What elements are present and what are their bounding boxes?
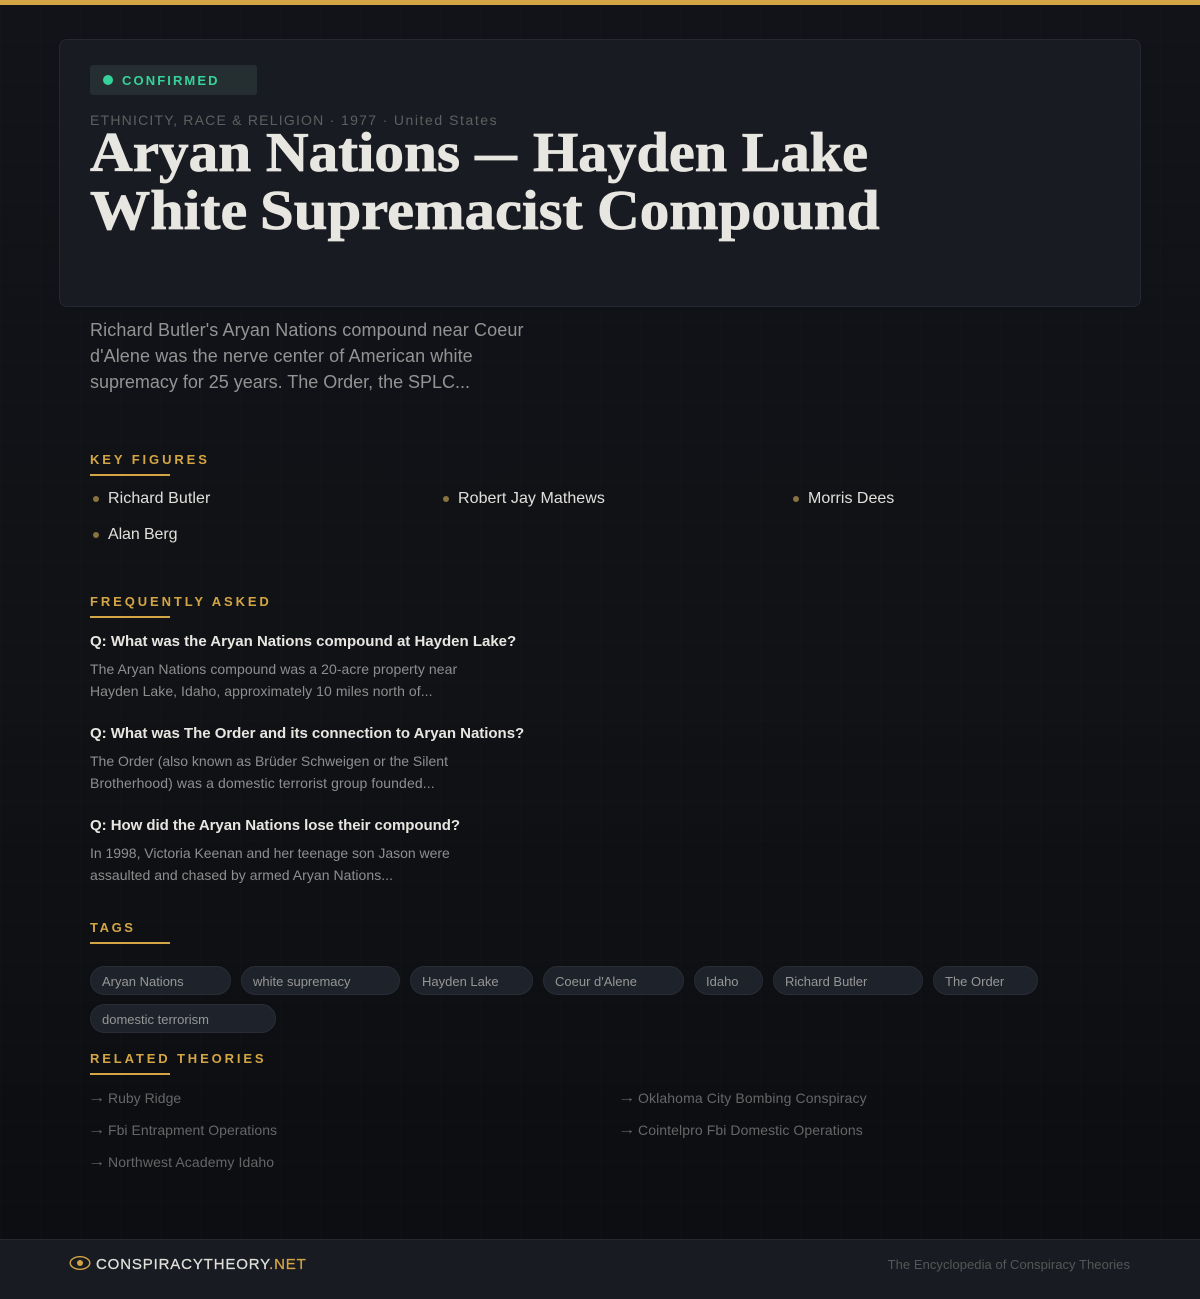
faq item 1 <box>90 633 516 699</box>
related theories list: → <box>88 1121 106 1137</box>
tag list: white supremacy <box>253 974 351 989</box>
figure: Morris Dees: Morris Dees <box>808 490 894 507</box>
faq item 2: Brotherhood) was a domestic terrorist group founded... <box>90 775 435 791</box>
title: Aryan Nations <box>90 122 460 184</box>
figure: Robert Jay Mathews: Robert Jay Mathews <box>458 490 605 507</box>
title: Supremacist <box>260 180 583 242</box>
badge: confirmed status <box>90 65 257 95</box>
panel: hero header <box>59 39 1141 307</box>
faq item 3: assaulted and chased by armed Aryan Nations... <box>90 867 393 883</box>
faq item 1: Hayden Lake, Idaho, approximately 10 miles north of... <box>90 683 433 699</box>
footer <box>0 1239 1200 1299</box>
icon: eye logo <box>70 1256 90 1270</box>
tag list: Coeur d'Alene <box>555 974 637 989</box>
related theories list: → <box>88 1089 106 1105</box>
related theories list: Oklahoma City Bombing Conspiracy <box>638 1090 867 1106</box>
related theories list: → <box>88 1153 106 1169</box>
title <box>90 122 880 242</box>
title: Hayden Lake <box>533 122 868 184</box>
heading: related theories: RELATED THEORIES <box>90 1051 266 1066</box>
related theories list: → <box>618 1121 636 1137</box>
related theories list: → <box>618 1089 636 1105</box>
tag list: The Order <box>945 974 1004 989</box>
badge label: CONFIRMED <box>122 73 220 88</box>
summary text: d'Alene was the nerve center of American white <box>90 346 473 366</box>
faq item 2: Q: What was The Order and its connection to Aryan Nations? <box>90 725 524 742</box>
title: Compound <box>597 180 880 242</box>
tag list: Richard Butler <box>785 974 867 989</box>
tag list: domestic terrorism <box>102 1012 209 1027</box>
category and date line: ETHNICITY, RACE & RELIGION · 1977 · United States <box>90 112 498 128</box>
related theories list <box>88 1089 867 1170</box>
icon: status dot <box>103 75 113 85</box>
faq item 3: In 1998, Victoria Keenan and her teenage son Jason were <box>90 845 450 861</box>
heading: frequently asked: FREQUENTLY ASKED <box>90 594 272 609</box>
faq item 2 <box>90 725 524 791</box>
related theories list: Cointelpro Fbi Domestic Operations <box>638 1122 863 1138</box>
title: — <box>475 122 517 184</box>
heading: key figures: KEY FIGURES <box>90 452 210 467</box>
faq item 1: The Aryan Nations compound was a 20-acre property near <box>90 661 457 677</box>
tag list: Aryan Nations <box>102 974 184 989</box>
related theories list: Ruby Ridge <box>108 1090 181 1106</box>
footer tagline: The Encyclopedia of Conspiracy Theories <box>888 1257 1130 1272</box>
title: White <box>90 180 247 242</box>
figure: Alan Berg: Alan Berg <box>108 526 177 543</box>
logo wordmark: CONSPIRACYTHEORY.NET <box>96 1256 307 1273</box>
faq item 2: The Order (also known as Brüder Schweigen or the Silent <box>90 753 448 769</box>
faq item 1: Q: What was the Aryan Nations compound at Hayden Lake? <box>90 633 516 650</box>
tag list: Hayden Lake <box>422 974 499 989</box>
figure: Richard Butler: Richard Butler <box>108 490 210 507</box>
faq item 3: Q: How did the Aryan Nations lose their compound? <box>90 817 460 834</box>
tag list <box>90 966 1038 1033</box>
summary text: supremacy for 25 years. The Order, the SPLC... <box>90 372 470 392</box>
summary text: Richard Butler's Aryan Nations compound near Coeur <box>90 320 524 340</box>
section: key figures <box>90 452 894 543</box>
summary text <box>90 320 524 392</box>
related theories list: Northwest Academy Idaho <box>108 1154 274 1170</box>
tag list: Idaho <box>706 974 739 989</box>
faq item 3 <box>90 817 460 883</box>
related theories list: Fbi Entrapment Operations <box>108 1122 277 1138</box>
heading: tags: TAGS <box>90 920 136 935</box>
